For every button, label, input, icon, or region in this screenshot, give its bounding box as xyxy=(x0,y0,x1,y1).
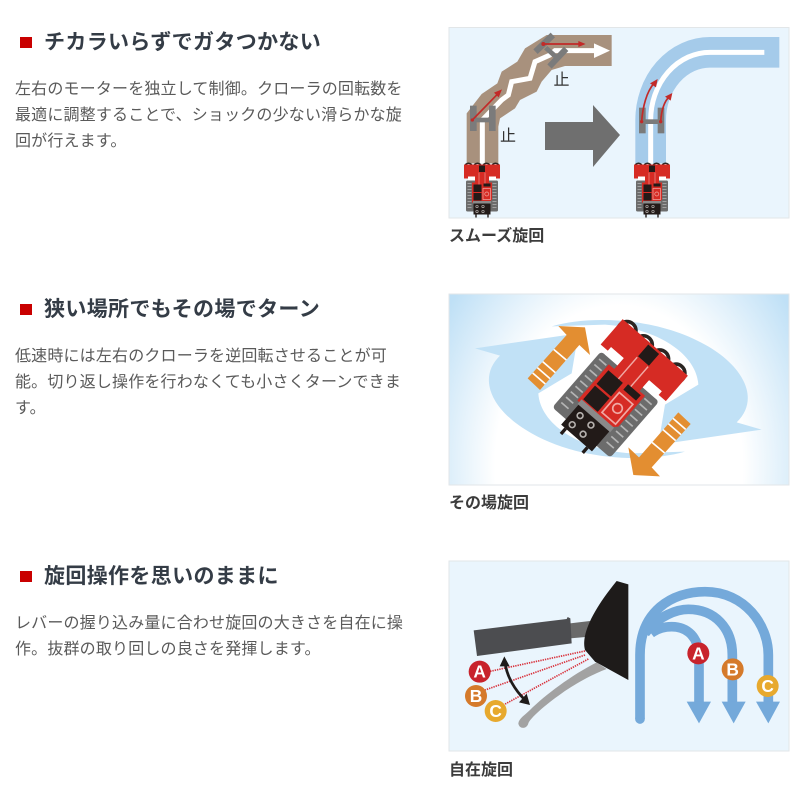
turn paths xyxy=(640,592,768,719)
arrow: before to after xyxy=(545,105,620,167)
label: stop lower: 止 xyxy=(500,127,516,145)
badges xyxy=(465,642,779,722)
arrowheads xyxy=(687,702,780,723)
caption: スムーズ旋回 xyxy=(449,228,544,245)
body text: 作。抜群の取り回しの良さを発揮します。 xyxy=(15,641,321,658)
body text xyxy=(15,80,403,150)
vehicle right xyxy=(634,163,670,218)
badges: A xyxy=(692,643,705,663)
section: spot turn xyxy=(15,298,529,512)
handle grip xyxy=(474,617,590,656)
vehicle left xyxy=(464,163,500,218)
section: smooth turn xyxy=(15,30,544,245)
housing xyxy=(584,581,628,680)
badges: B xyxy=(470,686,482,706)
body text: レバーの握り込み量に合わせ旋回の大きさを自在に操 xyxy=(15,615,403,632)
body text: 回が行えます。 xyxy=(15,133,127,150)
rotation swirl and arrows xyxy=(475,320,762,476)
bullet xyxy=(20,571,32,582)
body text: 左右のモーターを独立して制御。クローラの回転数を xyxy=(15,81,403,98)
vehicle rotated xyxy=(539,317,690,472)
diagram: smooth turn xyxy=(448,27,790,218)
brake lever xyxy=(518,662,607,728)
badges: B xyxy=(726,659,739,679)
body text: 最適に調整することで、ショックの少ない滑らかな旋 xyxy=(15,107,402,124)
section: lever xyxy=(15,564,513,779)
heading: 狭い場所でもその場でターン xyxy=(44,298,320,321)
body text xyxy=(15,614,403,658)
diagram: lever xyxy=(448,560,790,752)
bullet xyxy=(20,304,32,315)
body text xyxy=(15,347,401,417)
caption: その場旋回 xyxy=(449,495,529,512)
double arrow xyxy=(500,656,530,705)
body text: す。 xyxy=(15,400,46,417)
badges: C xyxy=(489,701,502,721)
caption: 自在旋回 xyxy=(449,762,513,779)
right path: smooth turn xyxy=(639,52,779,163)
diagram: spot turn xyxy=(448,294,790,486)
heading: 旋回操作を思いのままに xyxy=(44,565,279,588)
dotted lines xyxy=(485,651,588,705)
badges: A xyxy=(473,662,486,682)
body text: 低速時には左右のクローラを逆回転させることが可 xyxy=(15,348,387,365)
body text: 能。切り返し操作を行わなくても小さくターンできま xyxy=(15,374,401,391)
bullet xyxy=(20,37,32,48)
badges: C xyxy=(761,676,774,696)
left path: jerky turn xyxy=(467,33,612,163)
label: stop upper: 止 xyxy=(554,71,570,89)
heading: チカラいらずでガタつかない xyxy=(44,31,321,54)
